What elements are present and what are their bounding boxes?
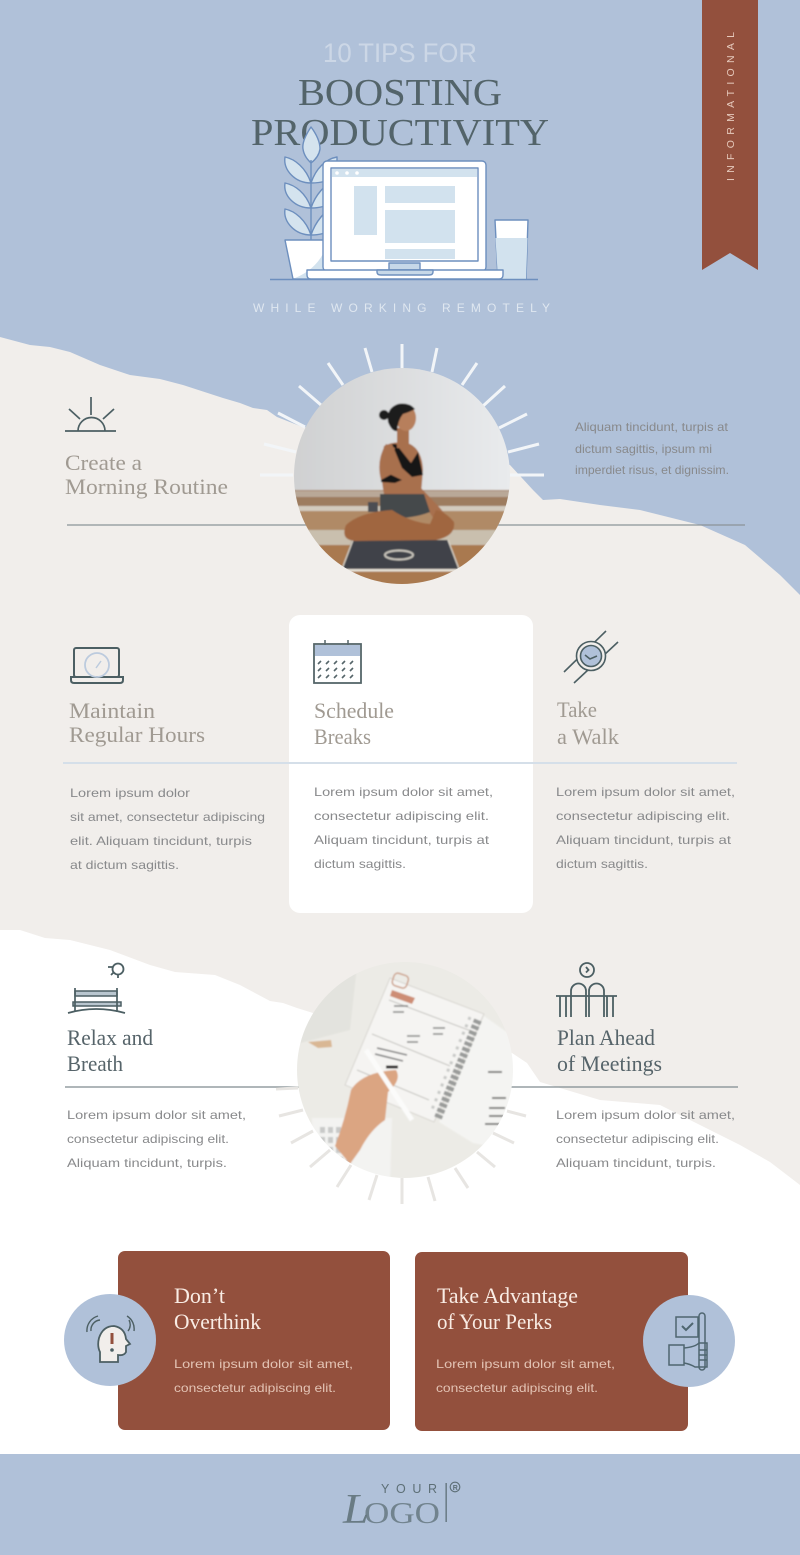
body text: consectetur adipiscing elit.: [556, 809, 730, 823]
body text: Aliquam tincidunt, turpis at: [556, 833, 732, 847]
body text: at dictum sagittis.: [70, 858, 179, 872]
title: PRODUCTIVITY: [251, 112, 549, 154]
icon: hand holding checkmark flag: [643, 1295, 735, 1387]
icon: laptop with gauge: [71, 648, 123, 683]
plant: [285, 127, 337, 240]
text: morning routine description: [575, 420, 729, 477]
body text: consectetur adipiscing elit.: [436, 1381, 598, 1395]
body text: Lorem ipsum dolor sit amet,: [67, 1108, 246, 1122]
logo: L: [342, 1487, 369, 1533]
heading: Schedule: [314, 698, 394, 723]
divider: [65, 1086, 738, 1088]
body text: elit. Aliquam tincidunt, turpis: [70, 834, 252, 848]
body text: [70, 786, 265, 872]
laptop stand: [389, 263, 420, 270]
title: [251, 38, 549, 154]
panel: take advantage of your perks: [415, 1252, 735, 1431]
heading: a Walk: [557, 724, 620, 749]
heading: Overthink: [174, 1309, 262, 1334]
heading: of Your Perks: [437, 1309, 552, 1334]
body text: Lorem ipsum dolor sit amet,: [314, 785, 493, 799]
heading: Take: [557, 697, 597, 722]
heading: Relax and: [67, 1025, 153, 1050]
heading: of Meetings: [557, 1051, 662, 1076]
text: morning routine description: Aliquam tincidunt, turpis at: [575, 420, 729, 434]
body text: [314, 785, 493, 871]
body text: [556, 1108, 735, 1170]
heading: Regular Hours: [69, 722, 205, 747]
heading: [174, 1283, 262, 1334]
footer band: [0, 1454, 800, 1555]
body text: sit amet, consectetur adipiscing: [70, 810, 265, 824]
body text: consectetur adipiscing elit.: [556, 1132, 719, 1146]
ribbon: informational: INFORMATIONAL: [725, 32, 737, 181]
body text: Lorem ipsum dolor sit amet,: [556, 785, 735, 799]
icon: wristwatch: [564, 631, 618, 683]
body text: Aliquam tincidunt, turpis.: [67, 1156, 227, 1170]
heading: Breath: [67, 1051, 123, 1076]
icon: head with alert: [64, 1294, 156, 1386]
divider: [63, 762, 737, 764]
heading: Breaks: [314, 724, 371, 749]
panel: schedule breaks card: [289, 615, 533, 913]
heading: [69, 698, 205, 747]
icon: bench and sun: [68, 964, 125, 1013]
body text: [67, 1108, 246, 1170]
tip: create a morning routine: [65, 397, 228, 499]
tip: schedule breaks: [314, 640, 493, 871]
heading: Maintain: [69, 698, 155, 723]
body text: consectetur adipiscing elit.: [314, 809, 489, 823]
heading: [314, 698, 394, 749]
icon: calendar: [314, 640, 361, 683]
text: morning routine description: dictum sagittis, ipsum mi: [575, 442, 712, 456]
tip: plan ahead of meetings: [556, 963, 735, 1170]
heading: [557, 697, 620, 749]
laptop base: [307, 270, 503, 279]
heading: Plan Ahead: [557, 1025, 655, 1050]
laptop screen: [331, 168, 478, 261]
panel: don't overthink: [64, 1251, 390, 1430]
divider: [67, 524, 745, 526]
body text: Lorem ipsum dolor sit amet,: [174, 1357, 353, 1371]
sun rays around yoga photo: [260, 344, 544, 475]
laptop lid: [323, 161, 486, 271]
text: morning routine description: imperdiet risus, et dignissim.: [575, 463, 729, 477]
body text: consectetur adipiscing elit.: [67, 1132, 229, 1146]
body text: [556, 785, 735, 871]
pot: [285, 240, 325, 279]
body text: [436, 1357, 615, 1395]
heading: [65, 450, 228, 499]
tip: relax and breath: [67, 964, 246, 1170]
heading: Take Advantage: [437, 1283, 578, 1308]
subtitle: WHILE WORKING REMOTELY: [253, 301, 550, 315]
body text: [174, 1357, 353, 1395]
tip: maintain regular hours: [69, 648, 265, 872]
photo: hand writing in planner: [297, 972, 513, 1178]
icon: sunrise: [65, 397, 116, 431]
body text: consectetur adipiscing elit.: [174, 1381, 336, 1395]
logo: YOUR: [381, 1482, 437, 1496]
heading: [557, 1025, 662, 1076]
body text: Lorem ipsum dolor sit amet,: [556, 1108, 735, 1122]
body text: Aliquam tincidunt, turpis at: [314, 833, 490, 847]
logo: [342, 1482, 460, 1533]
background: blue header: [0, 0, 800, 700]
background: torn cream band: [0, 337, 800, 1185]
trackpad notch: [377, 270, 433, 275]
icon: meeting table and clock: [556, 963, 617, 1017]
heading: [67, 1025, 153, 1076]
background: white lower section: [0, 900, 800, 1460]
title: 10 TIPS FOR: [323, 38, 477, 68]
ribbon: informational: [702, 0, 758, 270]
tip: take a walk: [556, 631, 735, 871]
illustration: laptop, plant and glass: [270, 127, 538, 280]
body text: dictum sagittis.: [556, 857, 648, 871]
title: BOOSTING: [298, 72, 502, 114]
body text: Lorem ipsum dolor sit amet,: [436, 1357, 615, 1371]
body text: Lorem ipsum dolor: [70, 786, 190, 800]
photo: woman doing yoga: [290, 364, 514, 588]
heading: [437, 1283, 578, 1334]
heading: Don’t: [174, 1283, 226, 1308]
logo: OGO: [364, 1495, 440, 1530]
sun rays around planner photo: [276, 1088, 526, 1204]
heading: Morning Routine: [65, 474, 228, 499]
body text: Aliquam tincidunt, turpis.: [556, 1156, 716, 1170]
logo: R: [453, 1485, 458, 1492]
glass: [495, 220, 528, 279]
heading: Create a: [65, 450, 142, 475]
body text: dictum sagittis.: [314, 857, 406, 871]
